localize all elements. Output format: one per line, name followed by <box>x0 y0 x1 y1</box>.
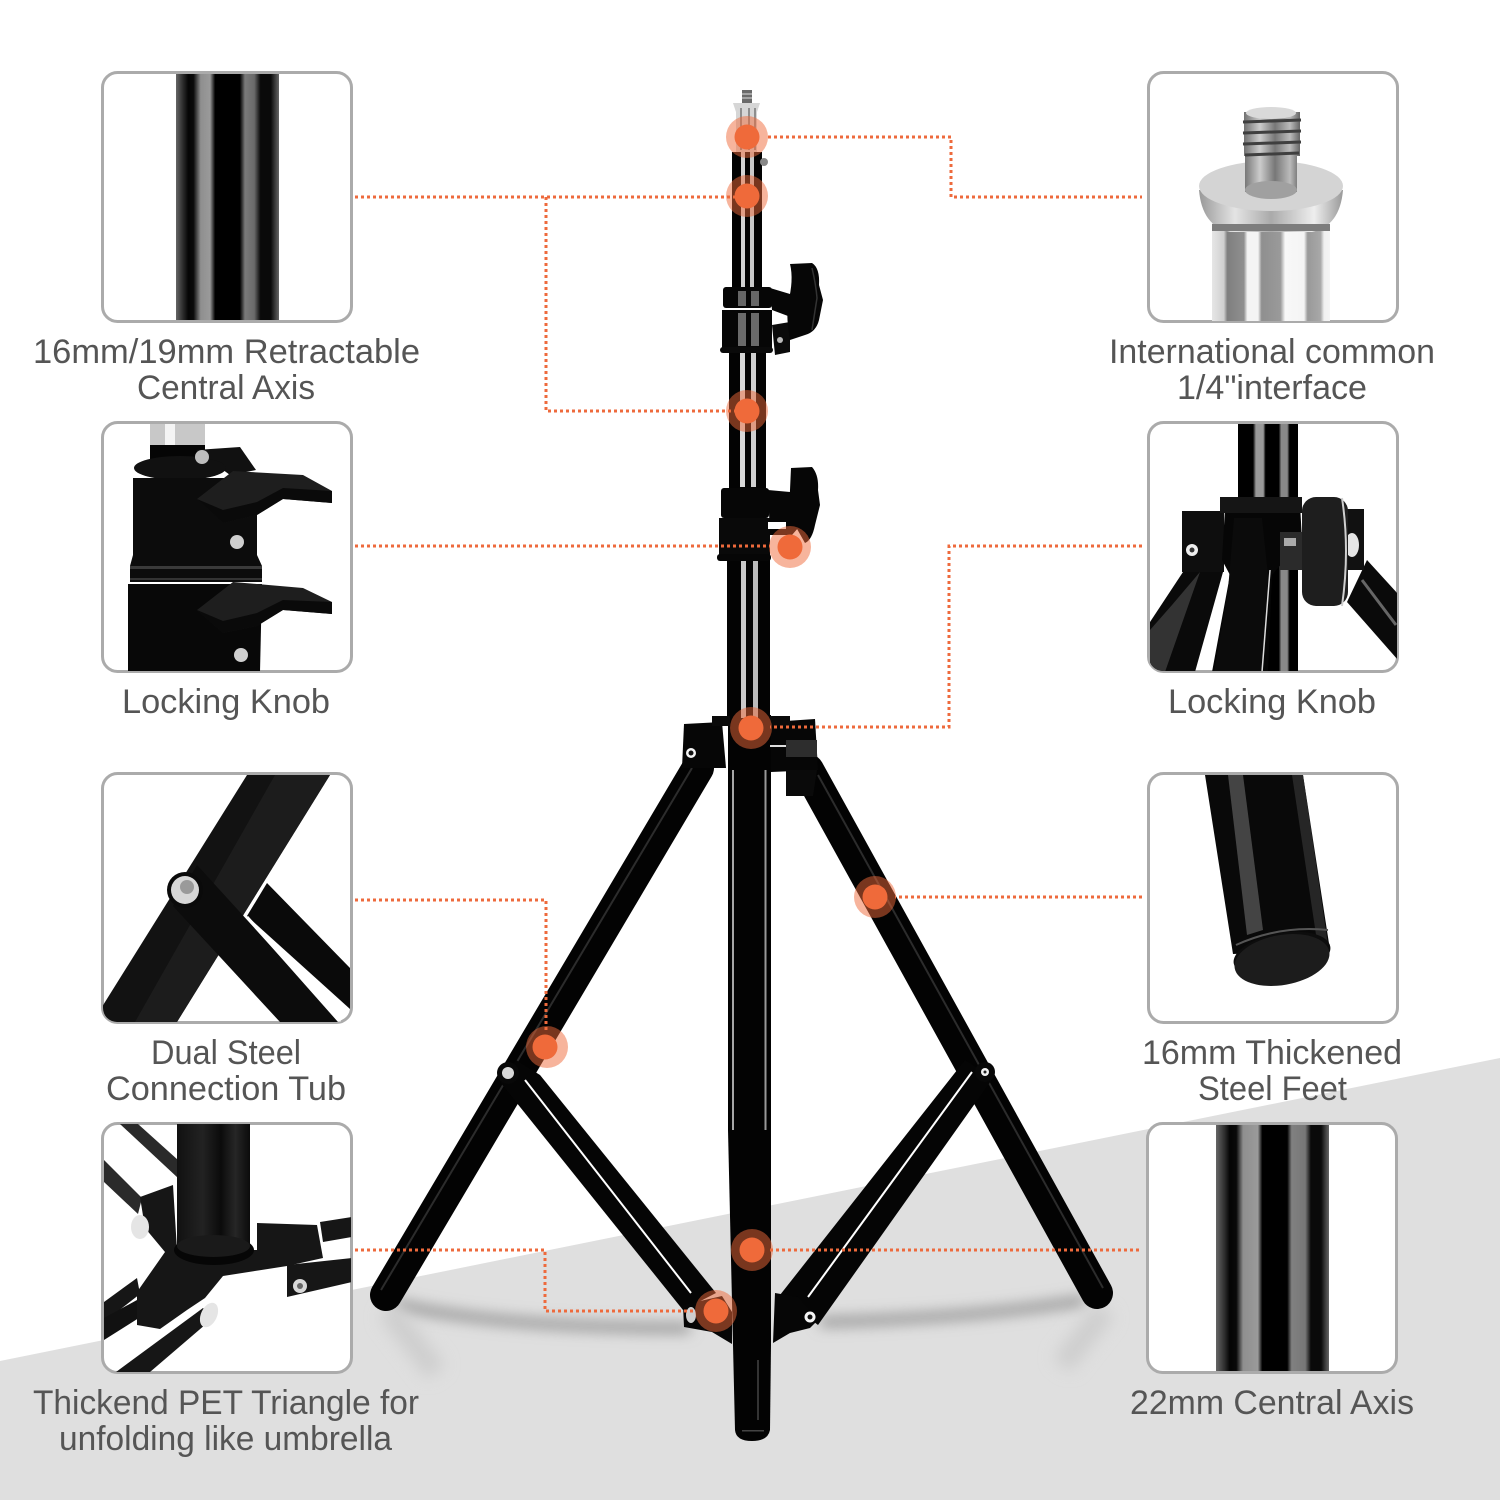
left strut <box>497 1060 716 1310</box>
caption: thickened steel feet <box>1142 1034 1402 1108</box>
panel: 22mm central axis <box>1148 1124 1396 1372</box>
caption: quarter inch interface <box>1109 333 1435 407</box>
dotted leader lines <box>355 137 1142 1311</box>
tripod light stand <box>381 90 1103 1441</box>
background: grey floor <box>0 1058 1500 1500</box>
photo: leg end with cap <box>1205 775 1334 993</box>
caption: thickened steel feet: 16mm Thickened <box>1142 1034 1402 1072</box>
caption: retractable central axis: 16mm/19mm Retractable <box>33 333 420 371</box>
caption: dual steel connection tub <box>106 1034 346 1108</box>
caption: locking knob right: Locking Knob <box>1168 683 1376 721</box>
main tube <box>728 715 771 1441</box>
panel: locking knob left <box>102 422 352 672</box>
caption: thickened steel feet: Steel Feet <box>1198 1070 1348 1108</box>
caption: thickened triangle base: Thickend PET Triangle for <box>33 1384 419 1422</box>
caption: dual steel connection tub: Connection Tub <box>106 1070 346 1108</box>
photo: silver spigot screw <box>1199 107 1343 321</box>
head: right knob <box>770 716 818 796</box>
mid tube <box>727 558 770 718</box>
floor shadows and reflections <box>388 1300 1105 1490</box>
caption: thickened triangle base: unfolding like umbrella <box>59 1420 392 1458</box>
caption: thickened triangle base <box>33 1384 419 1458</box>
right strut <box>780 1060 995 1325</box>
panel: thickened steel feet <box>1148 774 1398 1022</box>
photo: leg and strut joint <box>100 775 350 1022</box>
top tube <box>732 152 768 289</box>
left leg <box>381 768 698 1295</box>
photo: thin tube <box>176 74 279 320</box>
upper collar and knob <box>720 263 823 355</box>
lower collar and knob <box>717 467 820 561</box>
caption: quarter inch interface: International common <box>1109 333 1435 371</box>
photo: triangle hub <box>104 1124 352 1372</box>
upper tube <box>729 350 766 490</box>
photo: clamp collars with lever knobs <box>128 424 332 672</box>
caption: retractable central axis <box>33 333 420 407</box>
photo: leg head with knob <box>1150 424 1398 672</box>
panel: dual steel connection tub <box>100 774 352 1022</box>
panel: quarter inch interface <box>1148 72 1398 322</box>
top spigot <box>733 90 760 152</box>
caption: 22mm central axis: 22mm Central Axis <box>1130 1384 1414 1422</box>
caption: quarter inch interface: 1/4"interface <box>1177 369 1367 407</box>
head: left bracket <box>682 716 730 768</box>
base hub <box>683 1293 818 1344</box>
panel: locking knob right <box>1148 422 1398 672</box>
caption: locking knob left: Locking Knob <box>122 683 330 721</box>
right leg <box>808 770 1103 1293</box>
marker dots <box>526 116 896 1332</box>
panel: thickened triangle base <box>102 1124 352 1372</box>
caption: dual steel connection tub: Dual Steel <box>151 1034 301 1072</box>
caption: retractable central axis: Central Axis <box>137 369 315 407</box>
photo: thick tube <box>1216 1125 1329 1371</box>
panel: retractable central axis <box>102 72 352 322</box>
